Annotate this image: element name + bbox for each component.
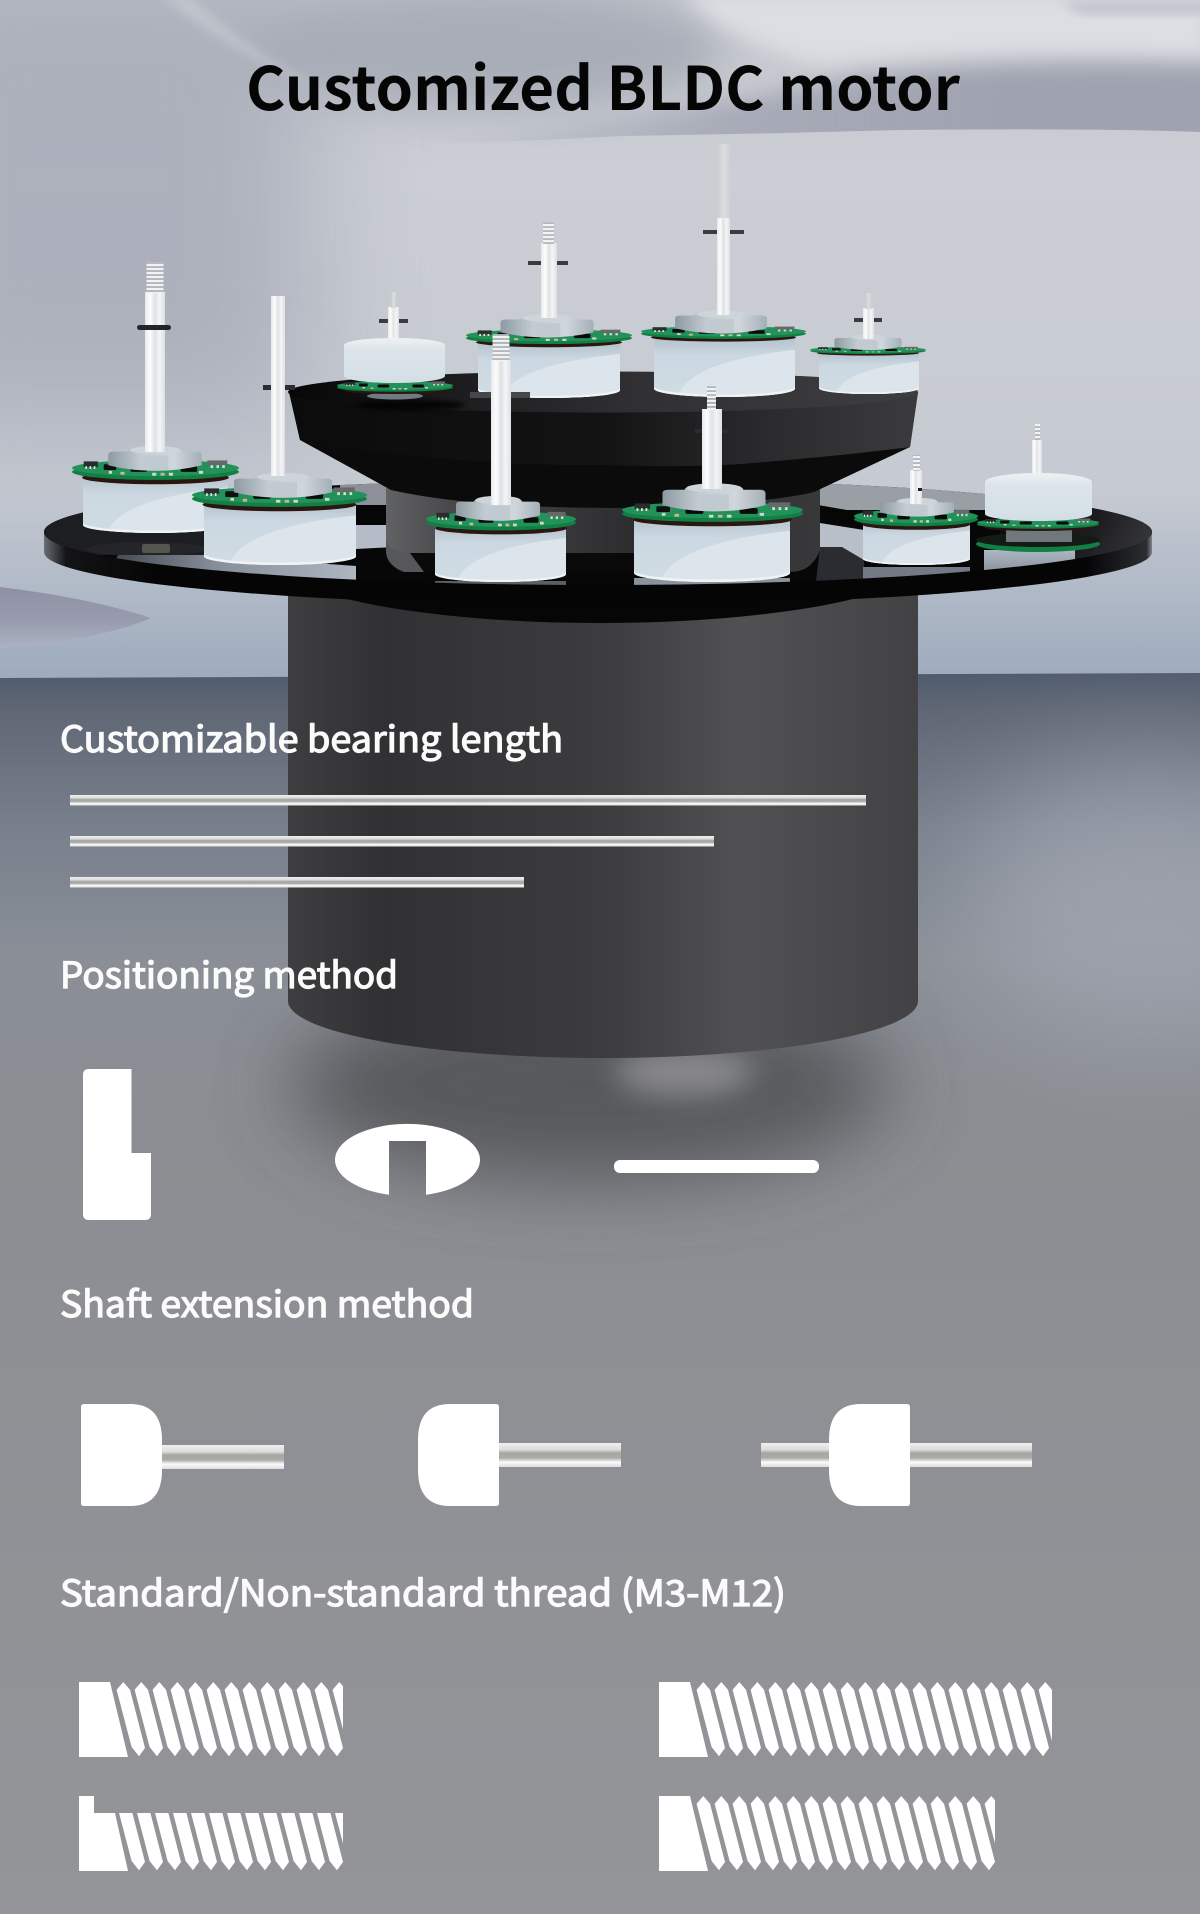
floor shadow under pedestal xyxy=(290,990,890,1180)
heading: thread: Standard/Non-standard thread (M3-M12) xyxy=(60,1565,786,1617)
shaft icon: double extension xyxy=(761,1404,1032,1506)
motor: front left A xyxy=(72,262,239,539)
thread icon: long xyxy=(659,1682,1067,1757)
motor: upper tier D xyxy=(466,222,632,404)
bearing length bars xyxy=(70,795,866,888)
floor highlight under pedestal xyxy=(615,1048,755,1096)
neck under upper tier xyxy=(386,488,820,572)
positioning icon: flat line xyxy=(614,1160,819,1173)
heading: positioning method: Positioning method xyxy=(60,947,398,999)
heading: shaft extension method: Shaft extension method xyxy=(60,1276,474,1328)
thread icon: short xyxy=(79,1682,343,1757)
positioning icon: stepped shaft xyxy=(83,1069,151,1220)
pedestal cylinder xyxy=(288,595,918,1058)
upper tier funnel xyxy=(288,372,918,508)
motor: front centre E xyxy=(426,334,576,588)
motor: front right I xyxy=(854,455,978,569)
shaft icon: reversed extension right xyxy=(418,1404,621,1506)
motor: front left B xyxy=(192,296,367,571)
motor: upper tier G small xyxy=(810,293,926,398)
positioning icon: slotted ellipse xyxy=(335,1124,480,1195)
motor: upper tier inverted C xyxy=(337,292,465,410)
heading: bearing length: Customizable bearing length xyxy=(60,711,563,763)
motor: upper tier F tall shaft xyxy=(641,144,806,403)
background: studio wall and floor xyxy=(0,0,1200,1034)
thread icon: medium xyxy=(659,1796,995,1871)
motor: front right inverted J xyxy=(976,424,1100,552)
motor: front centre H xyxy=(622,386,803,588)
shaft icon: single extension right xyxy=(81,1404,284,1506)
title: Customized BLDC motor xyxy=(246,41,961,128)
thread icon: short with step xyxy=(79,1796,343,1871)
big disc xyxy=(44,483,1152,600)
